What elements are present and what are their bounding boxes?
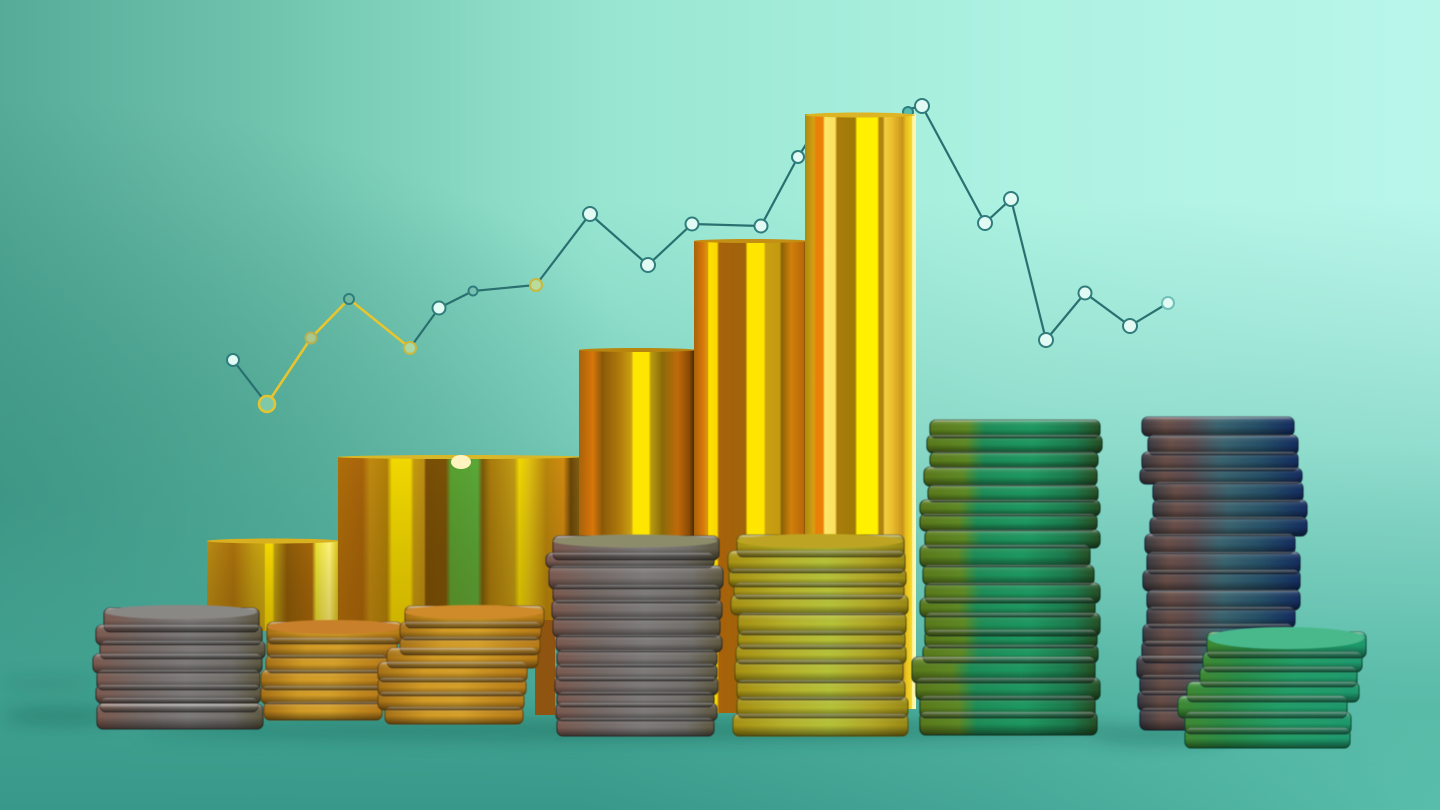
gold column 1 (207, 538, 340, 631)
gold column 3 (579, 348, 695, 550)
coin stack: grey tall (546, 534, 723, 736)
chart points (227, 99, 1174, 412)
coin stack: green short (1178, 627, 1366, 748)
coin stack: yellow (728, 534, 908, 736)
gold column 2 lower shadow (535, 620, 555, 715)
coin stack: blue tall (1137, 417, 1307, 730)
gold column 4 (694, 239, 808, 713)
floor shadows (0, 681, 1230, 743)
coin stack: orange B (378, 605, 544, 724)
coin stack: orange A (261, 620, 402, 720)
line chart (227, 99, 1174, 412)
coin stack: green tall (912, 420, 1102, 735)
gold column 2 (338, 455, 583, 637)
gold column 5 (805, 112, 916, 709)
coin stack: grey left (93, 605, 265, 729)
